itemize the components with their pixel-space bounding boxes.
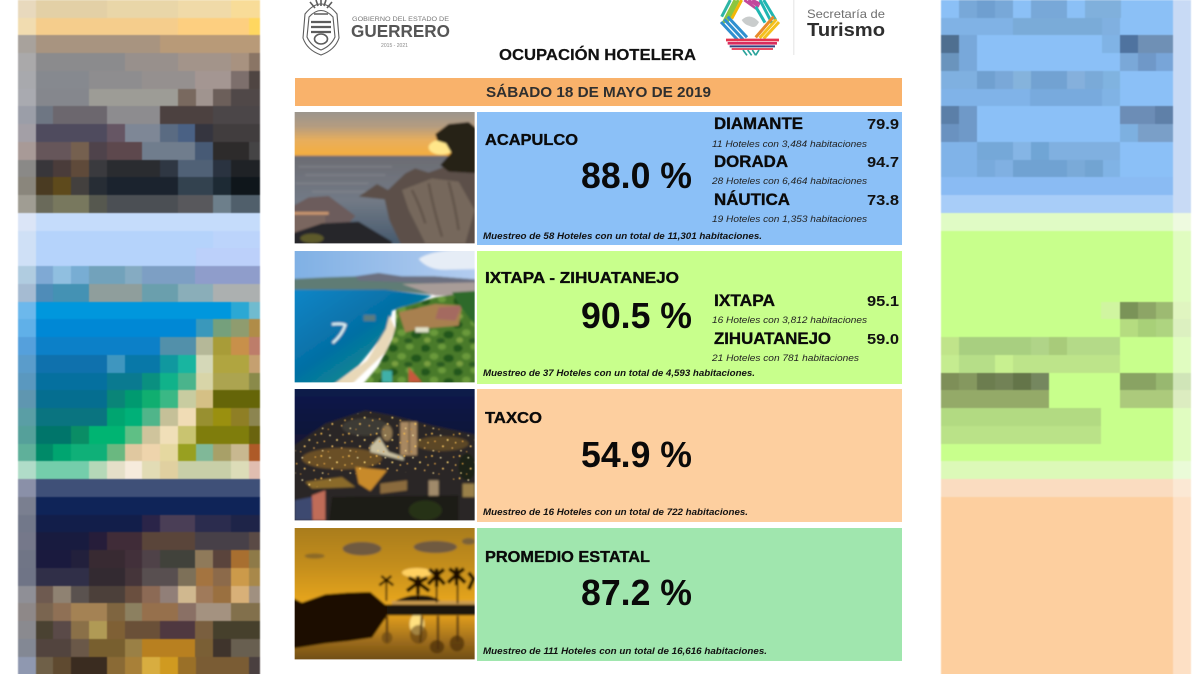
zone: Náutica xyxy=(712,190,899,225)
photo: palm trees at sunset xyxy=(292,526,479,663)
background mosaic: left blurred photo strip xyxy=(18,9,260,666)
info background xyxy=(477,251,902,384)
zone: Zihuatanejo: ZIHUATANEJO xyxy=(714,329,831,348)
value: 87.2 %: 87.2 % xyxy=(581,572,692,613)
title: OCUPACIÓN HOTELERA xyxy=(499,45,696,64)
sample note: Muestreo de 16 Hoteles con un total de 722 habitaciones. xyxy=(483,507,748,518)
info background xyxy=(477,112,902,245)
logo: Gobierno del Estado de Guerrero xyxy=(303,0,450,55)
zone: Ixtapa xyxy=(712,291,899,326)
panel: Promedio Estatal xyxy=(292,526,902,663)
zone: Diamante: 11 Hoteles con 3,484 habitaciones xyxy=(712,139,867,150)
text: Gobierno del Estado de: GOBIERNO DEL ESTADO DE xyxy=(352,16,449,23)
panel: Ixtapa - Zihuatanejo xyxy=(292,249,902,386)
sample note: Muestreo de 111 Hoteles con un total de 16,616 habitaciones. xyxy=(483,646,767,657)
value: 90.5 %: 90.5 % xyxy=(581,295,692,336)
heading: Promedio Estatal: PROMEDIO ESTATAL xyxy=(485,549,650,566)
wordmark: Guerrero: GUERRERO xyxy=(351,21,450,41)
zone: Ixtapa: 95.1 xyxy=(867,293,899,310)
sample note: Muestreo de 37 Hoteles con un total de 4,593 habitaciones. xyxy=(483,368,755,379)
panel: Acapulco xyxy=(292,110,902,247)
icon: state shield xyxy=(303,0,339,55)
wordmark: Turismo: Turismo xyxy=(807,20,885,40)
photo: Acapulco cliffs at sunset xyxy=(292,110,479,247)
zone: Ixtapa: 16 Hoteles con 3,812 habitaciones xyxy=(712,315,867,326)
zone: Diamante xyxy=(712,114,899,150)
date banner: SÁBADO 18 DE MAYO DE 2019 xyxy=(486,84,711,101)
zone: Dorada: 28 Hoteles con 6,464 habitaciones xyxy=(711,176,867,187)
info background xyxy=(477,528,902,661)
zone: Diamante: 79.9 xyxy=(867,116,899,133)
date banner xyxy=(295,78,902,106)
zone: Zihuatanejo: 59.0 xyxy=(867,331,899,348)
zone: Diamante: DIAMANTE xyxy=(714,114,803,133)
zone: Náutica: 73.8 xyxy=(867,192,899,209)
zone: Dorada xyxy=(711,152,899,187)
text: Secretaría de: Secretaría de xyxy=(807,7,885,21)
zone: Dorada: DORADA xyxy=(714,152,788,171)
logo: Secretaría de Turismo xyxy=(721,0,885,55)
heading: Acapulco: ACAPULCO xyxy=(485,132,578,149)
info background xyxy=(477,389,902,522)
heading: Ixtapa - Zihuatanejo: IXTAPA - ZIHUATANEJO xyxy=(485,270,679,287)
photo: Ixtapa bay aerial xyxy=(292,249,479,386)
icon: woven hexagon xyxy=(721,0,779,55)
sample note: Muestreo de 58 Hoteles con un total de 11,301 habitaciones. xyxy=(483,231,762,242)
zone: Ixtapa: IXTAPA xyxy=(714,291,775,310)
zone: Náutica: 19 Hoteles con 1,353 habitaciones xyxy=(712,214,867,225)
zone: Dorada: 94.7 xyxy=(867,154,899,171)
value: 88.0 %: 88.0 % xyxy=(581,155,692,196)
zone: Zihuatanejo: 21 Hoteles con 781 habitaciones xyxy=(711,353,859,364)
panel: Taxco xyxy=(292,387,902,524)
zone: Zihuatanejo xyxy=(711,329,899,364)
background mosaic: right blurred panel strip xyxy=(941,0,1191,666)
value: 54.9 %: 54.9 % xyxy=(581,434,692,475)
heading: Taxco: TAXCO xyxy=(485,410,542,427)
zone: Náutica: NÁUTICA xyxy=(714,190,790,209)
text: years: 2015 - 2021 xyxy=(381,43,408,49)
divider xyxy=(793,0,794,55)
photo: Taxco at night xyxy=(292,387,479,524)
